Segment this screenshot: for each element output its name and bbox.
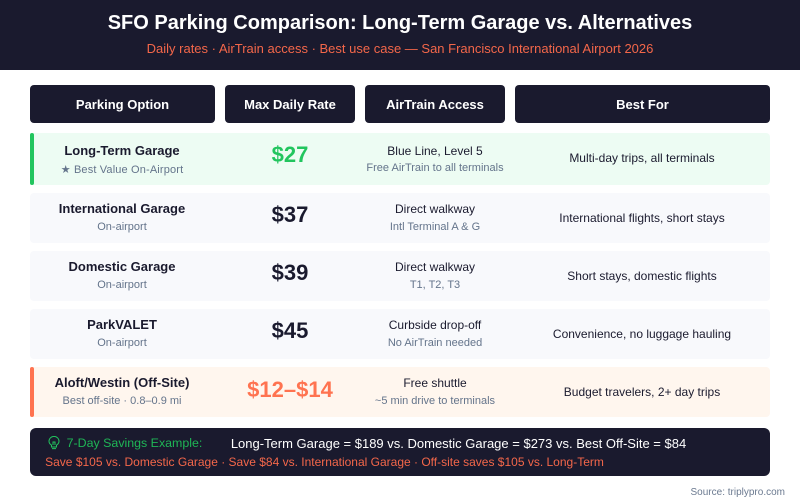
best for: Budget travelers, 2+ day trips [564, 385, 720, 399]
option note: On-airport [97, 337, 147, 349]
row: parkvalet [30, 309, 770, 359]
column header: best for: Best For [616, 97, 669, 112]
rate: $12–$14 [247, 377, 333, 402]
accent bar orange [30, 367, 34, 417]
best for: Convenience, no luggage hauling [553, 327, 731, 341]
access: Direct walkway [395, 202, 475, 216]
best for: International flights, short stays [559, 211, 725, 225]
access: Free shuttle [403, 376, 467, 390]
column header: airtrain access [365, 85, 505, 123]
savings label: 7-Day Savings Example: [67, 436, 202, 450]
option name: Long-Term Garage [64, 143, 180, 158]
option name: International Garage [59, 201, 185, 216]
title banner [0, 0, 800, 70]
access: Blue Line, Level 5 [387, 144, 483, 158]
column header: max daily rate [225, 85, 355, 123]
column header: parking option: Parking Option [76, 97, 169, 112]
option note: On-airport [97, 221, 147, 233]
icon: light bulb [48, 436, 60, 450]
savings detail: Save $105 vs. Domestic Garage · Save $84 vs. International Garage · Off-site saves $105 vs. Long-Term [45, 455, 604, 469]
option note: Best off-site · 0.8–0.9 mi [62, 395, 182, 407]
row: domestic garage [30, 251, 770, 301]
source note: Source: triplypro.com [691, 487, 785, 498]
row: long-term garage [30, 133, 770, 185]
savings callout [30, 428, 770, 476]
option name: ParkVALET [87, 317, 157, 332]
access note: ~5 min drive to terminals [375, 395, 495, 407]
rate: $27 [272, 142, 308, 167]
column header: parking option [30, 85, 215, 123]
title: SFO Parking Comparison: Long-Term Garage vs. Alternatives [108, 12, 692, 34]
access note: Free AirTrain to all terminals [366, 162, 504, 174]
option note: On-airport [97, 279, 147, 291]
best for: Short stays, domestic flights [567, 269, 717, 283]
rate: $39 [272, 260, 308, 285]
access: Direct walkway [395, 260, 475, 274]
best for: Multi-day trips, all terminals [569, 151, 715, 165]
option name: Domestic Garage [69, 259, 175, 274]
accent bar green [30, 133, 34, 185]
option name: Aloft/Westin (Off-Site) [55, 375, 189, 390]
rate: $45 [272, 318, 308, 343]
access note: Intl Terminal A & G [390, 221, 480, 233]
row: aloft/westin off-site [30, 367, 770, 417]
row: international garage [30, 193, 770, 243]
access note: No AirTrain needed [388, 337, 482, 349]
access: Curbside drop-off [389, 318, 481, 332]
column header: max daily rate: Max Daily Rate [244, 97, 336, 112]
savings comparison: Long-Term Garage = $189 vs. Domestic Garage = $273 vs. Best Off-Site = $84 [231, 436, 686, 451]
access note: T1, T2, T3 [410, 279, 460, 291]
rate: $37 [272, 202, 308, 227]
option note: ★ Best Value On-Airport [61, 164, 183, 176]
subtitle: Daily rates · AirTrain access · Best use case — San Francisco International Airport 2026 [147, 41, 653, 56]
column header: best for [515, 85, 770, 123]
column header: airtrain access: AirTrain Access [386, 97, 484, 112]
